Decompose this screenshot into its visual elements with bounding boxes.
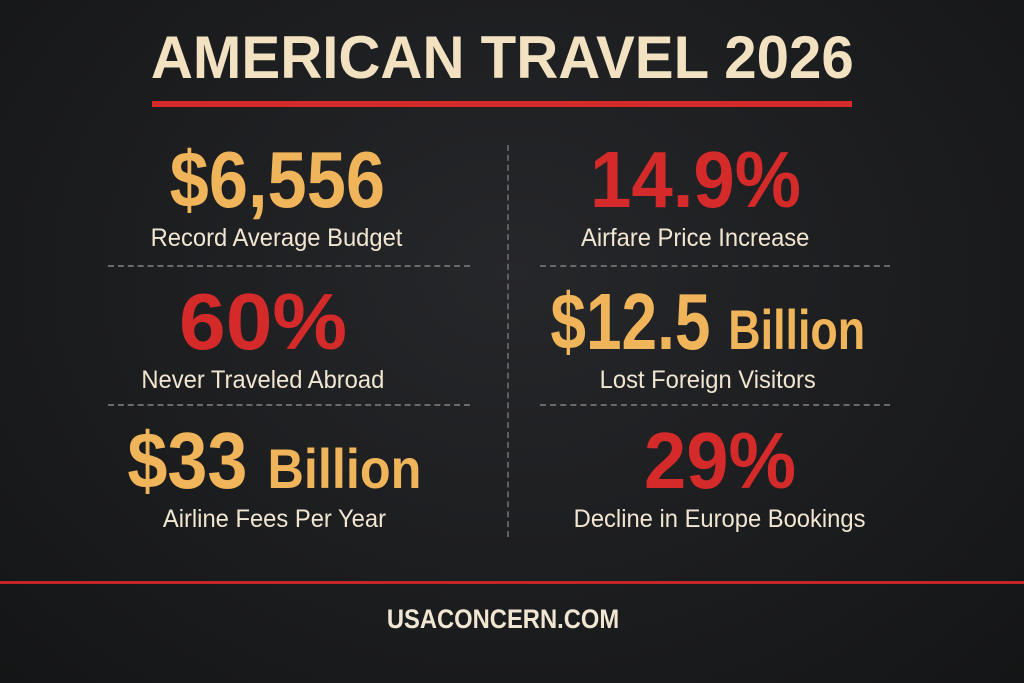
stat: budget xyxy=(151,135,403,252)
stat: airfare: 14.9% xyxy=(590,135,800,224)
stat: never abroad: 60% xyxy=(179,277,347,366)
stat: airline fees: $33 Billion xyxy=(127,416,421,505)
footer: USACONCERN.COM xyxy=(387,604,619,634)
stat: lost visitors: $12.5 Billion xyxy=(551,277,865,366)
stat: lost visitors: Lost Foreign Visitors xyxy=(600,366,816,394)
stat: budget: $6,556 xyxy=(169,135,385,224)
footer line xyxy=(0,581,1024,584)
stat: airline fees: Airline Fees Per Year xyxy=(162,505,386,533)
stat: never abroad xyxy=(142,277,384,394)
title underline xyxy=(152,101,852,107)
stat: airfare: Airfare Price Increase xyxy=(581,224,809,252)
stat: budget: Record Average Budget xyxy=(151,224,403,252)
title: AMERICAN TRAVEL 2026 xyxy=(151,24,853,91)
stat: never abroad: Never Traveled Abroad xyxy=(142,366,384,394)
stat: europe bookings: 29% xyxy=(644,416,796,505)
stat: europe bookings: Decline in Europe Bookings xyxy=(574,505,866,533)
stat: europe bookings xyxy=(574,416,866,533)
